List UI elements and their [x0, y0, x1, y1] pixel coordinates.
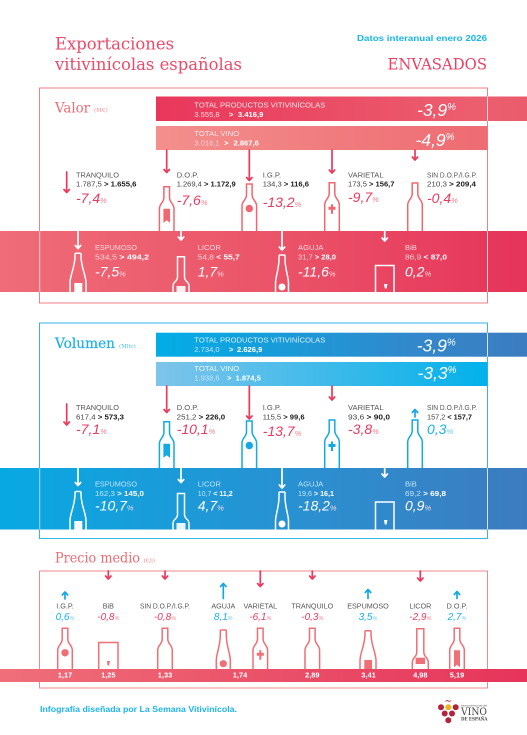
- item: varietal: 173,5 > 156,7: [348, 180, 394, 189]
- item: aguja: AGUJA: [298, 480, 324, 489]
- item: i.g.p.: [242, 170, 309, 231]
- item: i.g.p.: 134,3 > 116,6: [263, 180, 309, 189]
- heading: valor: [54, 100, 108, 116]
- item: varietal: -6,1%: [249, 612, 271, 623]
- item: i.g.p.: 0,6%: [56, 612, 75, 623]
- title: [54, 34, 242, 75]
- arrow: tranquilo: [64, 404, 69, 425]
- item: espumoso: ESPUMOSO: [95, 243, 137, 252]
- icon: bottle i.g.p.: [242, 421, 257, 468]
- item: d.o.p.: -10,1%: [177, 421, 216, 437]
- item: aguja: AGUJA: [211, 602, 235, 611]
- item: d.o.p.: D.O.P.: [177, 170, 199, 180]
- arrow: varietal: [329, 150, 335, 173]
- item: d.o.p.: 5,19: [450, 670, 464, 679]
- item: varietal: 93,6 > 90,0: [348, 412, 390, 421]
- item: licor: 54,8 < 55,7: [198, 253, 240, 262]
- icon: bottle varietal: [325, 420, 339, 468]
- bar: total productos valor: 3.555,8: [194, 110, 220, 119]
- band: volumen bottom row: [0, 468, 527, 530]
- item: d.o.p.: 1.269,4 > 1.172,9: [177, 180, 236, 189]
- item: bib: [97, 571, 119, 679]
- bar: total vino volumen: 1.874,5: [236, 374, 262, 383]
- bar: total productos volumen: [156, 333, 527, 357]
- item: aguja: -18,2%: [298, 498, 337, 514]
- item: espumoso: 3,41: [361, 670, 376, 679]
- item: tranquilo: -0,3%: [301, 612, 323, 623]
- date note: Datos interanual enero 2026: [357, 33, 487, 43]
- icon: bottle sin d.o.p.: [408, 420, 422, 468]
- item: bib: 0,9%: [405, 498, 431, 514]
- item: i.g.p.: [56, 592, 75, 679]
- arrow: i.g.p.: [247, 150, 252, 180]
- item: tranquilo: [76, 403, 124, 437]
- item: d.o.p.: 251,2 > 226,0: [177, 412, 225, 421]
- panel: volumen: [0, 323, 527, 538]
- item: varietal: -9,7%: [348, 189, 379, 205]
- heading: valor: Valor: [54, 100, 90, 116]
- bar: total productos volumen: -3,9: [417, 336, 447, 356]
- item: aguja: [276, 468, 337, 530]
- item: licor: 1,7%: [198, 264, 224, 280]
- item: aguja: -11,6%: [298, 264, 336, 280]
- item: aguja: 31,7 > 28,0: [298, 253, 336, 262]
- item: bib: BiB: [103, 602, 114, 611]
- item: espumoso: 534,5 > 494,2: [95, 253, 149, 262]
- item: licor: -2,9%: [409, 612, 431, 623]
- item: varietal: VARIETAL: [243, 602, 277, 611]
- item: i.g.p.: [242, 403, 305, 468]
- footer credit: Infografía diseñada por La Semana Vitivinícola.: [40, 705, 237, 714]
- item: i.g.p.: 1,17: [58, 670, 72, 679]
- band: precios: [0, 669, 527, 682]
- bar: total vino valor: >: [224, 138, 229, 147]
- item: sin d.o.p./i.g.p.: 210,3 > 209,4: [427, 180, 477, 189]
- bar: total vino volumen: -3,3: [418, 363, 448, 383]
- item: bib: BiB: [405, 480, 417, 489]
- item: licor: 4,98: [413, 670, 427, 679]
- arrow: d.o.p.: [164, 386, 169, 412]
- bar: total vino volumen: 1.938,6: [194, 374, 220, 383]
- subtitle: envasados: ENVASADOS: [388, 55, 487, 74]
- logo: vino de españa: [438, 700, 488, 723]
- item: sin d.o.p./i.g.p.: [408, 403, 477, 468]
- band: valor bottom row: [0, 231, 527, 292]
- item: d.o.p.: D.O.P.: [447, 602, 467, 611]
- bar: total productos valor: >: [229, 110, 234, 119]
- arrow: sin d.o.p.: [412, 410, 418, 417]
- logo: vino de españa: VINO: [460, 707, 487, 718]
- item: bib: 86,9 < 87,0: [405, 253, 447, 262]
- item: espumoso: [70, 231, 149, 292]
- bar: total vino valor: 2.867,6: [234, 138, 259, 147]
- item: tranquilo: [291, 571, 334, 679]
- item: aguja: 19,6 > 16,1: [298, 489, 335, 498]
- item: d.o.p.: [159, 170, 236, 231]
- arrow: varietal: [329, 386, 335, 400]
- item: licor: [173, 468, 233, 530]
- item: sin d.o.p./i.g.p.: [408, 170, 477, 231]
- logo: vino de españa: Interprofesional del: [461, 704, 487, 708]
- item: varietal: -3,8%: [348, 421, 379, 437]
- item: tranquilo: -7,1%: [76, 421, 107, 437]
- item: tranquilo: 617,4 > 573,3: [76, 412, 124, 421]
- item: tranquilo: TRANQUILO: [291, 602, 334, 611]
- item: bib: -0,8%: [97, 612, 119, 623]
- item: d.o.p.: D.O.P.: [177, 403, 199, 412]
- bar: total productos volumen: >: [229, 345, 234, 354]
- item: sin d.o.p./i.g.p.: [140, 571, 190, 679]
- bar: total productos volumen: 2.626,9: [237, 345, 262, 354]
- arrow: sin d.o.p.: [412, 150, 418, 160]
- item: varietal: VARIETAL: [348, 403, 384, 412]
- panel: precio medio: [0, 571, 527, 688]
- item: sin d.o.p./i.g.p.: SIN D.O.P./I.G.P.: [140, 602, 190, 611]
- bar: total vino valor: TOTAL VINO: [194, 129, 239, 138]
- item: bib: [376, 231, 447, 292]
- title: vitivinícolas españolas: [54, 55, 242, 75]
- item: sin d.o.p./i.g.p.: SIN D.O.P./I.G.P.: [427, 170, 477, 180]
- item: sin d.o.p./i.g.p.: 1,33: [158, 670, 172, 679]
- item: i.g.p.: 115,5 > 99,6: [263, 412, 305, 421]
- item: tranquilo: [76, 170, 136, 206]
- heading: volumen: Volumen: [54, 336, 115, 352]
- item: espumoso: -10,7%: [95, 498, 134, 514]
- item: espumoso: -7,5%: [95, 264, 126, 280]
- item: bib: 0,2%: [405, 264, 431, 280]
- item: licor: [409, 571, 431, 679]
- item: espumoso: 162,3 > 145,0: [95, 489, 144, 498]
- bar: total vino valor: [156, 126, 488, 150]
- item: d.o.p.: 2,7%: [447, 612, 467, 623]
- bar: total vino volumen: TOTAL VINO: [194, 364, 239, 373]
- bar: total vino valor: 3.016,1: [194, 138, 220, 147]
- item: sin d.o.p./i.g.p.: 0,3%: [427, 421, 453, 437]
- item: varietal: VARIETAL: [348, 170, 384, 180]
- item: espumoso: 3,5%: [359, 612, 378, 623]
- heading: volumen: (Mltr): [119, 343, 136, 350]
- item: tranquilo: 1.787,5 > 1.655,6: [76, 180, 136, 189]
- item: aguja: AGUJA: [298, 243, 324, 252]
- item: i.g.p.: -13,2%: [263, 194, 302, 210]
- item: sin d.o.p./i.g.p.: 157,2 < 157,7: [427, 412, 472, 421]
- item: bib: [376, 468, 446, 530]
- bar: total vino volumen: >: [227, 374, 232, 383]
- panel: valor: [0, 88, 527, 303]
- item: espumoso: [70, 468, 144, 530]
- item: aguja: [276, 231, 336, 292]
- item: bib: 1,25: [101, 670, 115, 679]
- item: espumoso: [347, 590, 389, 679]
- bar: total vino valor: -4,9: [416, 130, 446, 150]
- bar: total productos volumen: %: [447, 338, 456, 349]
- icon: bottle d.o.p.: [159, 422, 174, 468]
- item: licor: 10,7 < 11,2: [198, 489, 233, 498]
- item: i.g.p.: I.G.P.: [263, 170, 281, 180]
- bar: total vino volumen: [156, 362, 488, 386]
- title: Exportaciones: [55, 34, 174, 54]
- item: licor: 4,7%: [198, 498, 224, 514]
- item: aguja: 1,74: [233, 670, 248, 679]
- bar: total productos valor: -3,9: [417, 100, 447, 120]
- item: licor: [173, 231, 240, 292]
- item: bib: 69,2 > 69,8: [405, 489, 446, 498]
- item: varietal: [325, 403, 390, 468]
- item: espumoso: ESPUMOSO: [95, 480, 137, 489]
- item: tranquilo: TRANQUILO: [76, 403, 119, 412]
- item: aguja: 8,1%: [214, 612, 233, 623]
- item: sin d.o.p./i.g.p.: -0,8%: [154, 612, 176, 623]
- item: tranquilo: 2,89: [305, 670, 319, 679]
- item: i.g.p.: I.G.P.: [56, 602, 74, 611]
- item: varietal: [325, 170, 394, 231]
- logo: vino de españa: DE ESPAÑA: [461, 716, 488, 722]
- arrow: i.g.p.: [247, 386, 252, 419]
- arrow: d.o.p.: [164, 150, 169, 172]
- item: tranquilo: TRANQUILO: [76, 170, 119, 180]
- item: i.g.p.: I.G.P.: [263, 403, 281, 412]
- bar: total productos valor: 3.416,9: [238, 110, 263, 119]
- item: d.o.p.: [159, 403, 225, 468]
- item: varietal: [243, 571, 277, 669]
- bar: total productos valor: TOTAL PRODUCTOS VITIVINÍCOLAS: [194, 100, 325, 109]
- item: licor: LICOR: [409, 602, 431, 611]
- heading: precio medio: Precio medio: [55, 551, 140, 567]
- item: licor: LICOR: [198, 243, 221, 252]
- bar: total productos valor: %: [447, 102, 456, 113]
- heading: precio medio: (€/l): [144, 558, 155, 564]
- heading: valor: (M€): [94, 107, 108, 114]
- bar: total productos valor: [156, 96, 527, 121]
- item: licor: LICOR: [198, 480, 221, 489]
- item: aguja: [211, 584, 248, 679]
- item: bib: BiB: [405, 243, 417, 252]
- icon: bottle varietal: [325, 183, 339, 231]
- item: espumoso: ESPUMOSO: [347, 602, 389, 611]
- icon: bottle i.g.p.: [242, 184, 257, 231]
- bar: total vino volumen: %: [448, 365, 457, 376]
- item: tranquilo: -7,4%: [76, 190, 107, 206]
- item: d.o.p.: [447, 592, 467, 679]
- bar: total vino valor: %: [446, 132, 455, 143]
- icon: bottle sin d.o.p.: [408, 183, 422, 231]
- bar: total productos volumen: TOTAL PRODUCTOS VITIVINÍCOLAS: [194, 336, 325, 345]
- item: sin d.o.p./i.g.p.: -0,4%: [427, 190, 458, 206]
- icon: bottle d.o.p.: [159, 187, 174, 231]
- item: d.o.p.: -7,6%: [177, 192, 208, 208]
- bar: total productos volumen: 2.734,0: [194, 345, 220, 354]
- arrow: tranquilo: [64, 172, 69, 192]
- item: i.g.p.: -13,7%: [263, 423, 302, 439]
- item: sin d.o.p./i.g.p.: SIN D.O.P./I.G.P.: [427, 403, 477, 412]
